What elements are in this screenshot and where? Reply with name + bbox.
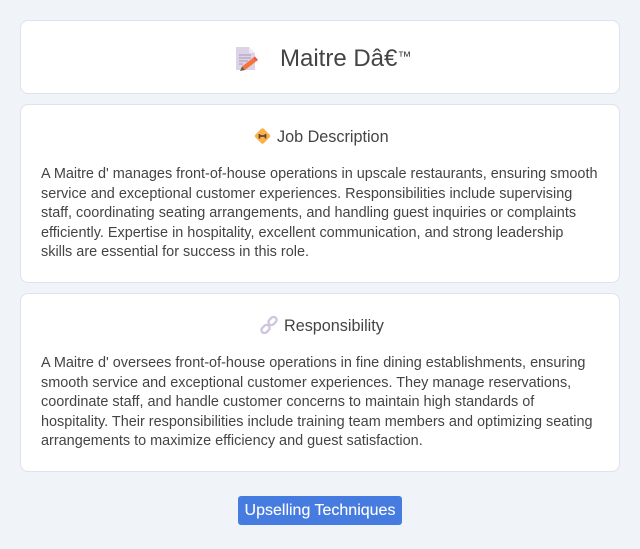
icon: construction sign: [254, 128, 270, 144]
text: responsibility body: [41, 355, 593, 449]
text: job description body: staff, coordinating seating arrangements, and handling guest inquiries or complaints: [41, 205, 576, 221]
panel: job description: [20, 104, 620, 283]
heading: responsibility: Responsibility: [284, 317, 384, 335]
panel: responsibility: [20, 293, 620, 472]
heading: job description: Job Description: [277, 128, 389, 146]
text: responsibility body: hospitality. Their responsibilities include training team members and optimizing seating: [41, 414, 593, 430]
text: job description body: efficiently. Expertise in hospitality, excellent communication, and strong leadership: [41, 225, 563, 241]
text: job description body: A Maitre d' manages front-of-house operations in upscale restaurants, ensuring smooth: [41, 166, 598, 182]
panel: title card: [20, 20, 620, 94]
icon: memo with pencil: [236, 47, 258, 71]
text: job description body: skills are essential for success in this role.: [41, 244, 309, 260]
title: Maitre Dâ€™: [280, 45, 411, 72]
text: job description body: service and exceptional customer experiences. Responsibilities include supervising: [41, 186, 572, 202]
text: responsibility body: arrangements to maximize efficiency and guest satisfaction.: [41, 433, 423, 449]
text: job description body: [41, 166, 598, 260]
button: upselling techniques: Upselling Techniques: [245, 502, 395, 519]
text: responsibility body: A Maitre d' oversees front-of-house operations in fine dining establishments, ensuring: [41, 355, 585, 371]
icon: chain link: [260, 316, 278, 334]
button: upselling techniques: [238, 496, 402, 525]
text: responsibility body: smooth service and exceptional customer experiences. They manage reservations,: [41, 375, 571, 391]
text: responsibility body: coordinate staff, and handle customer concerns to maintain high standards of: [41, 394, 534, 410]
